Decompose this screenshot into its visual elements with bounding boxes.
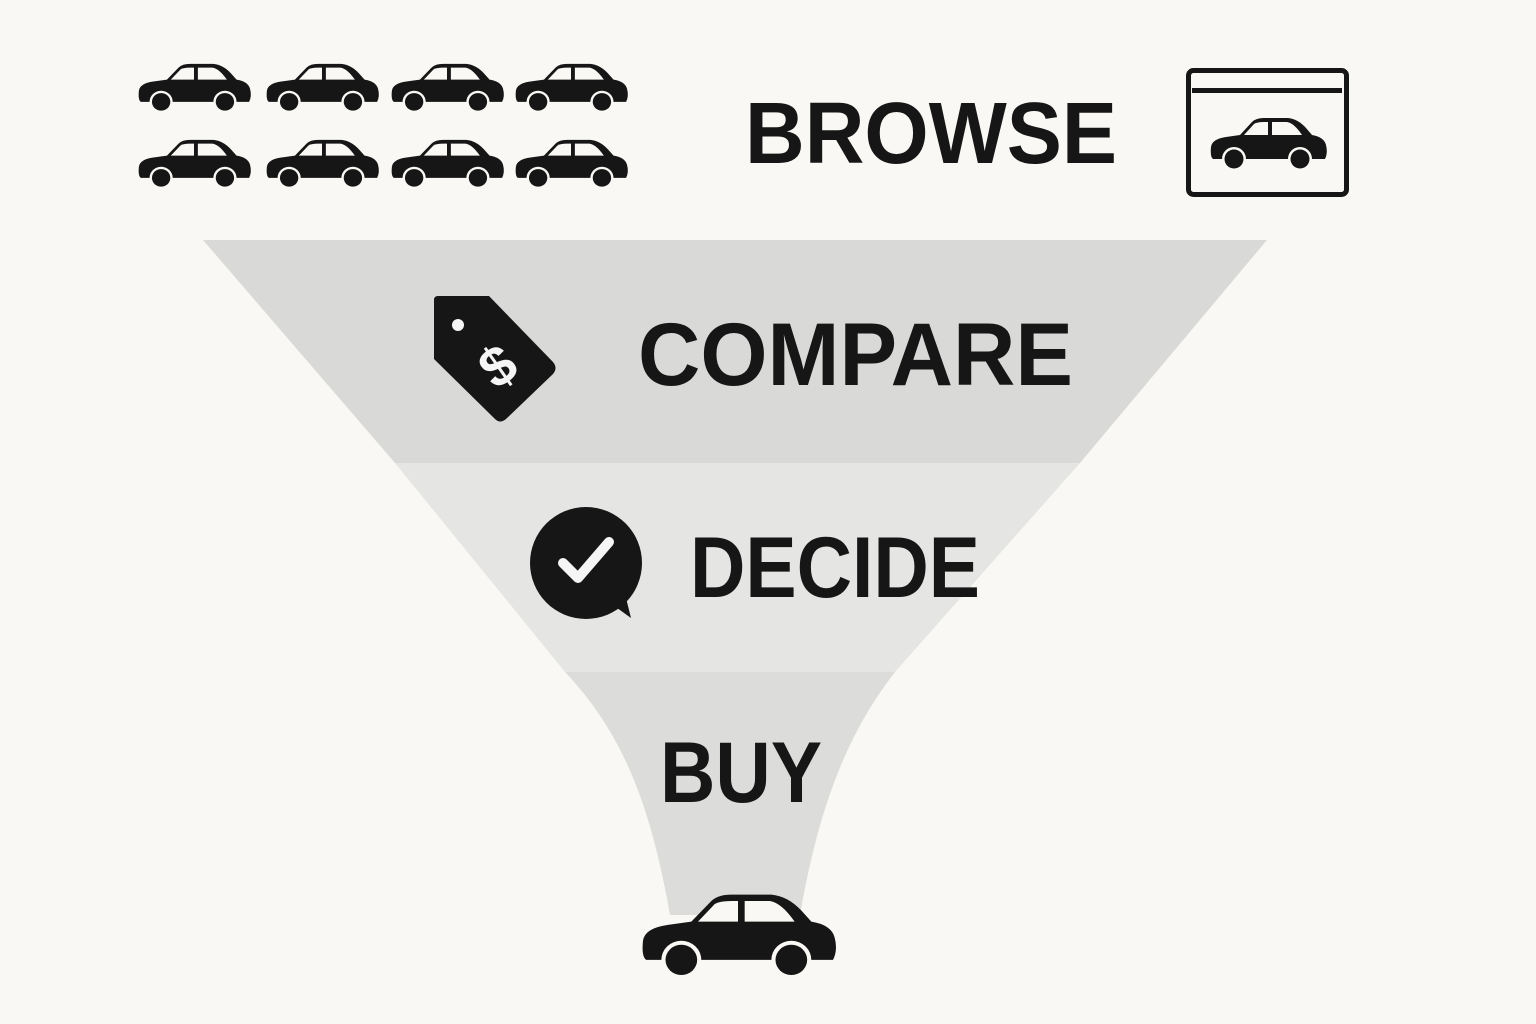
car grid <box>139 64 628 189</box>
heading: buy: BUY <box>660 725 822 821</box>
icon: price tag: $ <box>467 331 528 401</box>
heading: decide: DECIDE <box>690 520 980 616</box>
icon: check bubble <box>530 507 642 619</box>
heading: compare: COMPARE <box>638 304 1073 404</box>
funnel <box>203 240 1267 915</box>
icon: browser window <box>1188 70 1346 194</box>
icon: price tag <box>434 296 556 422</box>
heading: browse: BROWSE <box>745 85 1117 182</box>
icon: purchased car <box>643 895 836 979</box>
